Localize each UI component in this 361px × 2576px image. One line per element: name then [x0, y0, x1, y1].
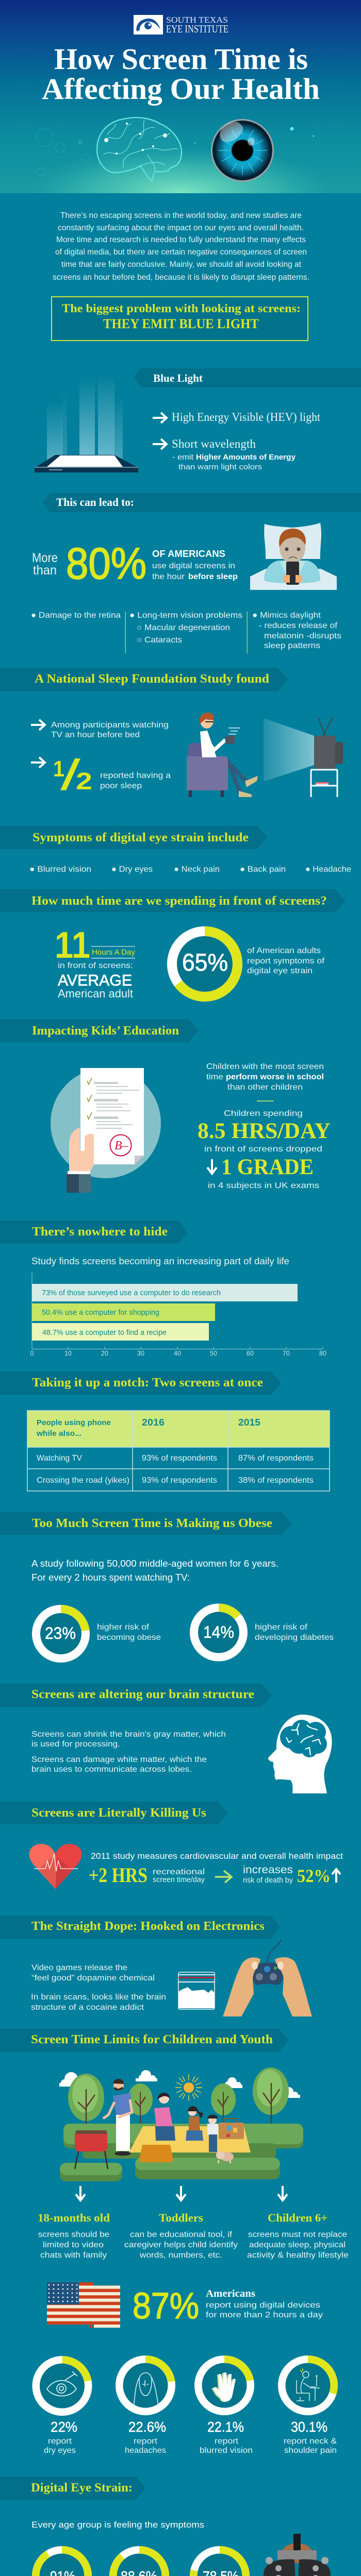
text block: risk of death study: risk of death by	[243, 1876, 293, 1885]
donut: neck and shoulder pain: 30.1%	[291, 2419, 327, 2435]
list: blue light facts: High Energy Visible (HEV) light	[172, 411, 321, 423]
ribbon heading: Brain structure: Screens are altering our brain structure	[31, 1688, 254, 1701]
text block: sleep study: 2	[76, 768, 92, 794]
list: symptoms: ● Headache	[305, 865, 351, 874]
stat: 11 hours a day: AVERAGE	[58, 971, 132, 989]
ribbon heading: National Sleep Foundation: A National Sleep Foundation Study found	[35, 672, 270, 686]
icon: head with brain	[268, 1715, 332, 1793]
text block: risk of death study	[89, 1851, 343, 1887]
list: blue light facts: - emit	[172, 453, 194, 462]
text block: sleep study	[31, 720, 171, 799]
stat: 11 hours a day	[55, 925, 136, 1000]
television	[318, 718, 333, 736]
title: How Screen Time is	[54, 42, 308, 76]
donut chart: 65 percent	[172, 931, 325, 996]
title: Affecting Our Health	[42, 72, 320, 106]
stat: 11 hours a day: 11	[55, 925, 90, 966]
text: study finds: Study finds screens becoming an increasing part of daily life	[31, 1256, 289, 1266]
column: toddlers: words, numbers, etc.	[139, 2251, 222, 2260]
chart axis: 0	[30, 1350, 34, 1357]
donut chart: 23 percent obese: higher risk of	[97, 1623, 150, 1632]
ribbon heading: Impacting Kids' Education: Impacting Kids’ Education	[32, 1024, 179, 1038]
logo: EYE INSTITUTE	[166, 23, 228, 35]
icon: digital eye	[194, 117, 315, 182]
text block: sleep study: /	[60, 751, 81, 799]
donut: aged 60 and up	[193, 2550, 246, 2576]
mother	[154, 2093, 175, 2141]
column: toddlers: Toddlers	[159, 2211, 203, 2224]
girl	[186, 2106, 203, 2141]
icon: woman with headache	[134, 2373, 159, 2407]
column: children 6+: adequate sleep, physical	[249, 2241, 346, 2249]
donut: aged 40 to 59	[113, 2550, 166, 2576]
arrow	[31, 720, 45, 730]
list: consequences: sleep patterns	[264, 641, 320, 650]
donut chart: 23 percent obese: 23%	[45, 1624, 76, 1642]
text block: introduction: of digital media, but there are certain negative consequences of screen	[55, 248, 307, 257]
chart axis: 60	[247, 1350, 254, 1357]
bar chart: computer use: 48.7% use a computer to find a recipe	[42, 1328, 167, 1337]
text block: sleep study: 1	[53, 756, 64, 782]
arrow	[31, 757, 45, 768]
table: phone use while doing other things: Watching TV	[37, 1454, 82, 1463]
list: consequences: - reduces release of	[259, 621, 338, 630]
column: children 6+: screens must not replace	[248, 2230, 347, 2239]
list: symptoms: ● Blurred vision	[29, 865, 91, 874]
ribbon heading: This can lead to: This can lead to:	[56, 496, 134, 509]
ribbon heading: Nowhere to hide: There’s nowhere to hide	[32, 1225, 168, 1239]
stat: 80 percent of Americans: before sleep	[188, 572, 238, 581]
text block: dopamine: In brain scans, looks like the brain	[31, 1993, 166, 2002]
text block: obesity study: A study following 50,000 middle-aged women for 6 years.	[31, 1558, 278, 1569]
stat: 87 percent of Americans: for more than 2 hours a day	[206, 2311, 323, 2319]
column: children 6+: Children 6+	[268, 2211, 327, 2224]
chart axis: 50	[210, 1350, 217, 1357]
text block: brain effects: brain uses to communicate across lobes.	[31, 1765, 192, 1774]
stat: 87 percent of Americans: Americans	[206, 2288, 255, 2299]
list: blue light facts: Higher Amounts of Energy	[196, 453, 296, 462]
clouds and sun	[59, 2070, 300, 2101]
table: phone use while doing other things: 2016	[142, 1417, 165, 1428]
icon: heart with ECG	[29, 1844, 81, 1889]
ribbon heading: Symptoms	[0, 826, 267, 849]
donut: neck and shoulder pain	[282, 2359, 337, 2455]
bar chart: computer use: 73% of those surveyed use a computer to do research	[42, 1289, 221, 1297]
ribbon heading: Obese: Too Much Screen Time is Making us Obese	[32, 1517, 272, 1530]
callout: blue light problem	[52, 297, 308, 341]
table: phone use while doing other things: 93% of respondents	[142, 1476, 217, 1485]
column: 18 months old	[38, 2211, 110, 2260]
panel: hero header	[0, 0, 361, 193]
text block: sleep study: poor sleep	[100, 782, 142, 790]
text block: risk of death study: 52%	[297, 1866, 331, 1886]
donut chart: 14 percent diabetes: higher risk of	[255, 1623, 308, 1632]
chart axis: 70	[283, 1350, 290, 1357]
column: children 6+: activity & healthy lifestyle	[247, 2251, 349, 2260]
donut: blurred vision: report	[215, 2437, 239, 2446]
icon: graded test paper held by a hand: B–	[114, 1139, 129, 1153]
icon: woman at phoropter eye exam	[258, 2534, 335, 2576]
text block: risk of death study: increases	[243, 1864, 293, 1876]
icon: man watching television	[187, 713, 343, 797]
ribbon heading: How much time: How much time are we spending in front of screens?	[31, 894, 327, 908]
stat: 87 percent of Americans	[133, 2286, 323, 2327]
stat: 11 hours a day: Hours A Day	[92, 948, 136, 957]
grass islands	[60, 2124, 303, 2181]
table: phone use while doing other things: 93% of respondents	[142, 1454, 217, 1463]
list: consequences: ● Long-term vision problems	[129, 611, 242, 620]
list: blue light facts	[153, 411, 321, 471]
donut: dry eyes: dry eyes	[44, 2446, 76, 2455]
suitcase	[219, 2119, 244, 2139]
text block: risk of death study: screen time/day	[153, 1875, 205, 1884]
ribbon heading: Screen time limits	[0, 2029, 289, 2052]
column: toddlers	[124, 2211, 238, 2260]
chart axis: 10	[64, 1350, 72, 1357]
donut: headaches	[119, 2359, 172, 2455]
text block: risk of death study: +2 HRS	[89, 1863, 147, 1887]
text block: risk of death study: recreational	[153, 1868, 205, 1876]
ribbon heading: Two screens at once: Taking it up a notch: Two screens at once	[32, 1376, 263, 1389]
list: symptoms: ● Neck pain	[174, 865, 220, 874]
icon: hands holding a game controller	[223, 1940, 312, 2016]
column: toddlers: caregiver helps child identify	[124, 2241, 238, 2249]
ribbon heading: Two screens at once	[0, 1371, 281, 1395]
list: consequences: ○ Macular degeneration	[137, 623, 230, 632]
ribbon heading: Brain structure	[0, 1684, 272, 1707]
ribbon heading: National Sleep Foundation	[0, 668, 288, 691]
donut: blurred vision: 22.1%	[207, 2419, 244, 2435]
ribbon heading: Nowhere to hide	[0, 1221, 188, 1244]
illustration: family picnic	[59, 2067, 303, 2181]
ribbon heading: Symptoms: Symptoms of digital eye strain include	[32, 831, 249, 844]
chart axis	[30, 1347, 326, 1357]
arrow	[153, 439, 167, 449]
stat: 11 hours a day: in front of screens:	[58, 961, 133, 970]
text block: obesity study: For every 2 hours spent watching TV:	[31, 1572, 190, 1583]
title	[42, 42, 320, 106]
donut chart: 14 percent diabetes	[194, 1607, 334, 1657]
text block: sleep study: reported having a	[100, 771, 171, 780]
table: phone use while doing other things: 87% of respondents	[238, 1454, 314, 1463]
donut: dry eyes: 22%	[51, 2419, 77, 2435]
ribbon heading: Screen time limits: Screen Time Limits for Children and Youth	[31, 2033, 273, 2046]
list: symptoms: ● Dry eyes	[111, 865, 153, 874]
column: 18 months old: 18-months old	[38, 2211, 110, 2224]
text block: kids education stats: 8.5 HRS/DAY	[198, 1119, 331, 1143]
text block: kids education stats: perform worse in school	[226, 1073, 324, 1081]
icon: graded test paper held by a hand	[51, 1068, 161, 1193]
column: 18 months old: screens should be	[38, 2230, 109, 2239]
donut chart: 65 percent: report symptoms of	[247, 957, 325, 965]
arrow	[207, 1159, 217, 1174]
text block: introduction: time that are fairly conclusive. Mainly, we should all avoid looking at	[61, 260, 302, 269]
ribbon heading: Obese	[0, 1512, 292, 1535]
donut chart: 14 percent diabetes: 14%	[203, 1623, 234, 1641]
stat: 80 percent of Americans: the hour	[152, 572, 185, 581]
list: consequences	[31, 611, 341, 653]
table: phone use while doing other things	[27, 1411, 330, 1491]
arrow	[215, 1871, 232, 1883]
text block: sleep study: TV an hour before bed	[51, 731, 140, 739]
ribbon heading: This can lead to	[43, 493, 361, 512]
donut chart: 23 percent obese	[36, 1609, 161, 1658]
table: phone use while doing other things: 38% of respondents	[238, 1476, 314, 1485]
father	[103, 2079, 132, 2156]
donut chart: 65 percent: of American adults	[247, 946, 321, 955]
icon: blurred hand	[211, 2372, 236, 2402]
text block: kids education stats: in 4 subjects in UK exams	[208, 1181, 319, 1190]
dog	[216, 2151, 234, 2163]
text block: introduction: More time and research is needed to fully understand the many effects	[56, 235, 306, 244]
donut chart: 65 percent: digital eye strain	[247, 967, 313, 975]
text block: obesity study	[31, 1558, 278, 1583]
ribbon heading: Killing us: Screens are Literally Killing Us	[31, 1806, 206, 1820]
icon: kid in bed with phone	[250, 523, 337, 590]
chart axis: 30	[137, 1350, 144, 1357]
table: phone use while doing other things: while also...	[36, 1429, 81, 1438]
donut: neck and shoulder pain: shoulder pain	[284, 2446, 337, 2455]
text block: introduction: There’s no escaping screens in the world today, and new studies are	[60, 211, 302, 220]
stat: 80 percent of Americans	[32, 539, 238, 588]
text: every age group: Every age group is feeling the symptoms	[31, 2520, 204, 2530]
ribbon heading: Hooked on electronics: The Straight Dope: Hooked on Electronics	[31, 1920, 265, 1933]
text block: introduction: constantly surfacing about the impact on our eyes and overall health.	[58, 224, 304, 232]
text block: dopamine: structure of a cocaine addict	[31, 2003, 144, 2012]
logo	[134, 15, 228, 35]
arrows: down to age groups	[76, 2186, 287, 2200]
stat: 80 percent of Americans: OF AMERICANS	[152, 549, 225, 559]
ribbon heading: Killing us	[0, 1802, 228, 1824]
icon: baggie of powder	[178, 1972, 215, 2009]
list: symptoms: ● Back pain	[240, 865, 286, 874]
text block: brain effects: Screens can shrink the brain's gray matter, which	[31, 1730, 226, 1739]
text block: kids education stats: time	[206, 1073, 223, 1081]
list: consequences: ● Damage to the retina	[31, 611, 121, 620]
text block: introduction: screens an hour before bed, because it is likely to disrupt sleep patterns.	[53, 273, 309, 282]
list: consequences: ○ Cataracts	[137, 636, 182, 645]
text block: kids education stats: in front of screens dropped	[204, 1145, 322, 1154]
column: 18 months old: limited to video	[43, 2241, 104, 2249]
man's legs	[227, 760, 247, 793]
grill	[75, 2130, 108, 2169]
picnic blanket	[129, 2126, 251, 2153]
text block: brain effects: is used for processing.	[31, 1740, 120, 1749]
icon: tablet emitting light	[35, 375, 138, 472]
text block: dopamine: “feel good” dopamine chemical	[31, 1974, 155, 1982]
ribbon heading: Impacting Kids' Education	[0, 1019, 199, 1042]
text block: introduction	[53, 211, 309, 282]
text block: kids education stats: Children with the most screen	[206, 1062, 324, 1071]
stat: 80 percent of Americans: use digital screens in	[152, 562, 235, 570]
text block: dopamine: Video games release the	[31, 1963, 127, 1972]
ribbon heading: Digital Eye Strain: Digital Eye Strain:	[31, 2481, 133, 2495]
text block: kids education stats: Children spending	[224, 1109, 303, 1118]
decorative bubbles	[36, 129, 185, 181]
stat: 80 percent of Americans: than	[33, 563, 57, 578]
text block: brain effects: Screens can damage white matter, which the	[31, 1755, 207, 1764]
text block: kids education stats	[198, 1062, 331, 1190]
text block: kids education stats: than other children	[227, 1083, 303, 1092]
stat: 11 hours a day: American adult	[58, 987, 133, 1000]
donut chart: 14 percent diabetes: developing diabetes	[255, 1633, 334, 1642]
text block: brain effects	[31, 1730, 226, 1774]
bar chart: computer use	[30, 1272, 326, 1357]
ribbon heading: Digital Eye Strain	[0, 2477, 146, 2500]
ribbon heading: Blue Light: Blue Light	[153, 372, 203, 384]
text block: sleep study: Among participants watching	[51, 721, 169, 730]
list: blue light facts: than warm light colors	[178, 463, 262, 471]
donut: neck and shoulder pain: report neck &	[284, 2437, 337, 2446]
donut: headaches: headaches	[125, 2446, 166, 2455]
logo: SOUTH TEXAS	[166, 15, 228, 25]
boy	[207, 2114, 218, 2152]
callout: blue light problem: The biggest problem with looking at screens:	[62, 302, 301, 315]
donut: aged 18 to 39	[36, 2550, 88, 2576]
column: 18 months old: chats with family	[40, 2251, 107, 2260]
donut: headaches: report	[134, 2437, 158, 2446]
donut chart: 23 percent obese: becoming obese	[97, 1633, 161, 1642]
arrow	[153, 413, 167, 423]
stat: 87 percent of Americans: 87%	[133, 2286, 199, 2327]
donut: dry eyes	[36, 2360, 88, 2455]
ribbon heading: How much time	[0, 889, 346, 912]
list: blue light facts: Short wavelength	[172, 437, 256, 450]
arrow	[332, 1869, 340, 1883]
list: consequences: melatonin -disrupts	[264, 632, 341, 640]
text block: kids education stats: 1 GRADE	[221, 1155, 314, 1179]
table: phone use while doing other things: 2015	[238, 1417, 260, 1428]
icon: eye with dropper	[47, 2371, 77, 2396]
text block: dopamine	[31, 1963, 166, 2012]
bar chart: computer use: 50.4% use a computer for shopping	[42, 1308, 159, 1317]
donut: headaches: 22.6%	[128, 2419, 166, 2435]
donut: blurred vision: blurred vision	[200, 2446, 253, 2455]
ribbon heading: Hooked on electronics	[0, 1916, 280, 1939]
list: consequences: ● Mimics daylight	[252, 611, 321, 620]
icon: glowing brain	[97, 117, 182, 181]
table: phone use while doing other things: People using phone	[37, 1418, 111, 1427]
stat: 80 percent of Americans: 80%	[66, 539, 146, 588]
ribbon heading: Blue Light	[134, 368, 361, 387]
trees	[68, 2067, 289, 2130]
table: phone use while doing other things: Crossing the road (yikes)	[37, 1476, 129, 1485]
stat: 87 percent of Americans: report using digital devices	[206, 2301, 320, 2310]
chart axis: 20	[101, 1350, 108, 1357]
chart axis: 40	[174, 1350, 181, 1357]
donut chart: 65 percent: 65%	[182, 948, 228, 976]
column: toddlers: can be educational tool, if	[130, 2230, 233, 2239]
stat: 80 percent of Americans: More	[32, 551, 58, 565]
donut: dry eyes: report	[48, 2437, 72, 2446]
chart axis: 80	[319, 1350, 326, 1357]
list: symptoms	[29, 865, 351, 874]
icon: person at desk	[297, 2368, 320, 2401]
donut: blurred vision	[198, 2359, 253, 2455]
column: children 6+	[247, 2211, 349, 2260]
icon: American flag	[47, 2282, 120, 2328]
callout: blue light problem: THEY EMIT BLUE LIGHT	[103, 316, 259, 331]
text block: risk of death study: 2011 study measures cardiovascular and overall health impact	[91, 1851, 343, 1861]
picnic basket	[139, 2145, 173, 2162]
